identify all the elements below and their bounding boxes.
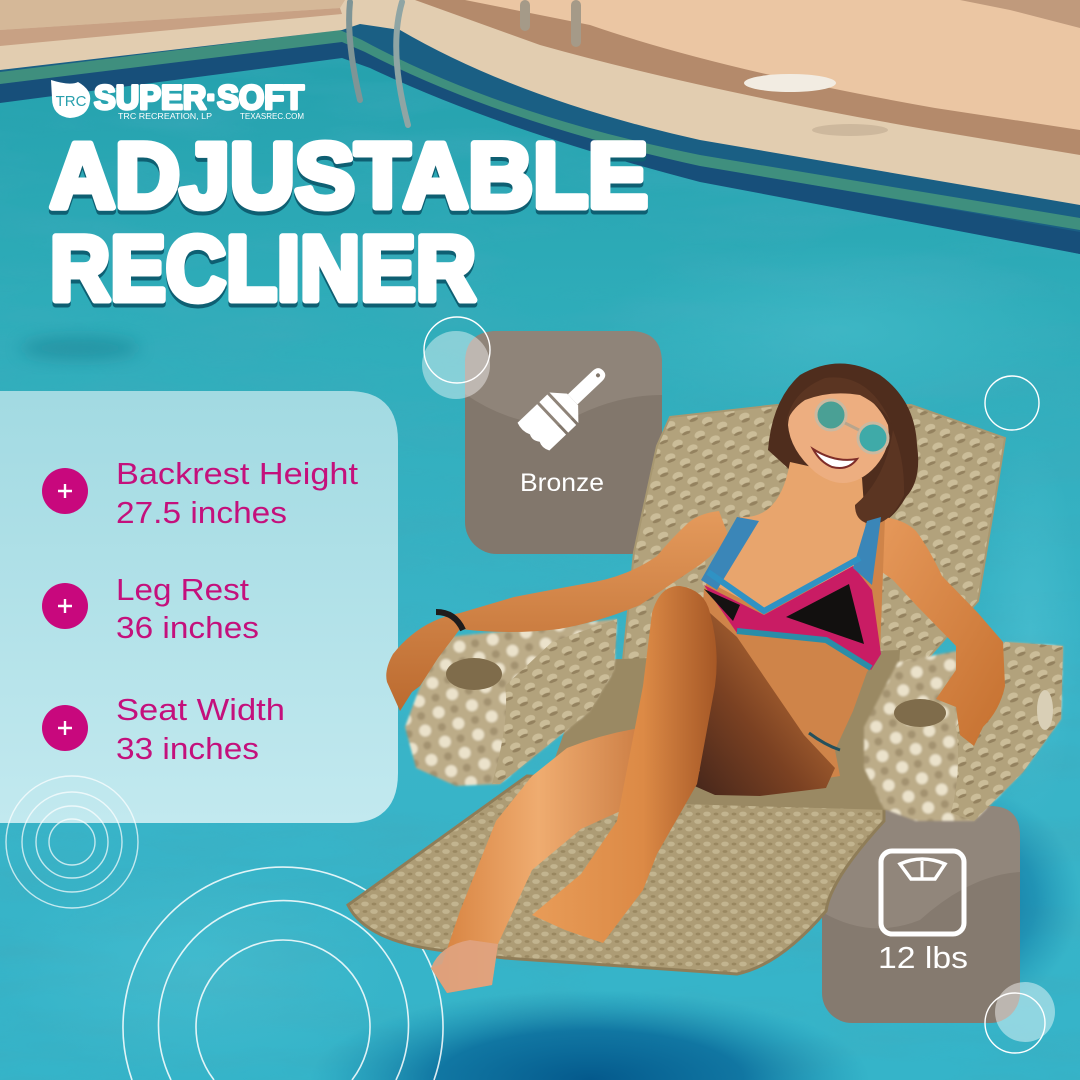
product photo: woman on recliner: [348, 364, 1063, 993]
decorative ring right: [985, 376, 1039, 430]
title line 2: RECLINER: [50, 218, 476, 320]
logo: TRC Super-Soft: [51, 79, 304, 121]
woman: foot in water: [431, 940, 498, 993]
woman: raised leg: [532, 586, 717, 943]
spec: leg rest: 36 inches: [116, 610, 259, 645]
float right armrest: [864, 642, 1063, 821]
woman: watch: [436, 612, 463, 630]
decorative circles bottom: [123, 867, 443, 1080]
woman: right arm: [871, 517, 1005, 746]
panel: colour bronze: [465, 331, 662, 554]
spec: leg rest: [42, 572, 259, 645]
woman: extended leg: [431, 729, 700, 993]
pool deck and coping: [0, 0, 1080, 254]
spec: leg rest: Leg Rest: [116, 572, 249, 607]
woman: face: [788, 385, 889, 483]
woman: neck and chest: [705, 462, 866, 611]
woman: left arm: [386, 511, 730, 711]
woman: raised thigh underside: [690, 613, 835, 796]
woman: smile: [813, 449, 857, 468]
logo mark: TRC drop: [51, 80, 90, 118]
float backrest: [620, 405, 1005, 690]
decorative bubble bottom right: [985, 982, 1055, 1053]
logo wordmark: SUPER·SOFT: [94, 79, 304, 117]
panel: specifications: [0, 391, 398, 823]
title: [50, 125, 648, 324]
woman: bikini top: [701, 517, 881, 670]
spec: seat width: [42, 692, 285, 766]
title line 1: ADJUSTABLE: [50, 129, 648, 231]
spec: seat width: Seat Width: [116, 692, 285, 727]
woman: bikini string: [809, 733, 840, 750]
float footrest: [348, 776, 884, 974]
panel: weight: [822, 806, 1020, 1023]
title line 2: RECLINER: [50, 222, 476, 324]
decorative circles left: [6, 776, 138, 908]
icon: weighing scale: [881, 851, 964, 934]
woman: torso: [700, 517, 885, 795]
logo mark: TRC drop: TRC: [56, 93, 87, 110]
decorative bubble top: [422, 317, 490, 399]
title line 1: ADJUSTABLE: [50, 125, 648, 227]
woman: hair front: [786, 377, 904, 524]
logo subline right: TEXASREC.COM: [240, 112, 304, 121]
float left armrest: [405, 619, 617, 786]
icon: paint brush: [517, 355, 618, 454]
spec: backrest height: [42, 456, 358, 530]
spec: seat width: 33 inches: [116, 731, 259, 766]
spec: backrest height: 27.5 inches: [116, 495, 287, 530]
label: bronze: Bronze: [520, 469, 604, 497]
float seat: [540, 650, 900, 810]
woman: sunglasses: [816, 400, 888, 453]
label: weight: 12 lbs: [878, 940, 968, 975]
spec: backrest height: Backrest Height: [116, 456, 358, 491]
woman: hair back: [768, 364, 918, 525]
logo subline left: TRC RECREATION, LP: [118, 112, 212, 121]
pool ladder rails: [349, 2, 576, 125]
